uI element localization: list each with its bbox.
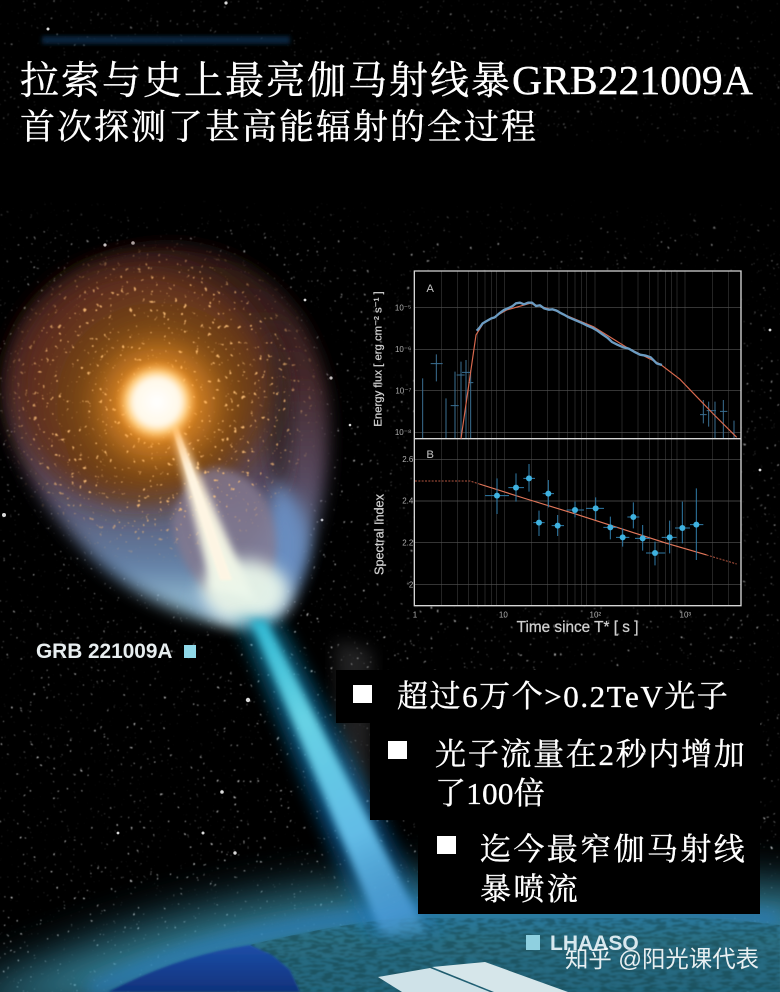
callout: narrowest jet: 暴喷流	[480, 872, 580, 907]
y ticks	[395, 303, 414, 589]
watermark: 知乎 @阳光课代表	[565, 946, 759, 972]
ground texture	[250, 918, 780, 992]
y ticks: 10⁻⁷	[395, 387, 411, 396]
earth and LHAASO ground	[0, 878, 780, 992]
title: 拉索与史上最亮伽马射线暴	[20, 60, 512, 103]
grey haze beside callouts	[336, 640, 372, 830]
white glow at jet base	[201, 560, 289, 624]
dim gap inside right rim	[265, 330, 292, 500]
chart: GRB light curve and spectral index: Spectral Index	[372, 493, 386, 575]
core glow	[102, 347, 214, 459]
chart: GRB light curve and spectral index: B	[426, 449, 434, 461]
x ticks: 10³	[680, 610, 691, 619]
spectral points	[494, 475, 699, 556]
orange inner cloud	[14, 265, 270, 505]
y ticks: 10⁻⁸	[395, 428, 411, 437]
flux error bars	[423, 354, 734, 438]
callout: over 60,000 photons: 超过6万个>0.2TeV光子	[397, 679, 729, 714]
y ticks: 2.6	[402, 455, 414, 464]
blue lower lobe	[190, 480, 308, 622]
x ticks: 10	[499, 610, 508, 619]
spectral fit	[479, 484, 707, 555]
atmosphere haze	[0, 878, 780, 992]
y ticks: 2.2	[402, 538, 414, 547]
outer shell	[6, 245, 329, 624]
observatory panels	[378, 968, 490, 992]
callout: photon flux growth: 了100倍	[435, 776, 545, 811]
frame	[414, 271, 741, 606]
ocean	[108, 945, 300, 992]
y ticks: 2	[409, 580, 414, 589]
white jet	[171, 425, 255, 600]
y ticks: 10⁻⁵	[395, 303, 411, 312]
x ticks	[413, 610, 691, 619]
chart: GRB light curve and spectral index: Time since T* [ s ]	[517, 619, 638, 636]
y ticks: 10⁻⁶	[395, 345, 411, 354]
label: GRB 221009A: GRB 221009A	[36, 640, 172, 663]
callout: over 60,000 photons	[336, 670, 760, 723]
y ticks: 2.4	[402, 497, 414, 506]
callout: photon flux growth: 光子流量在2秒内增加	[435, 737, 746, 772]
illustration: gamma-ray burst nebula	[0, 230, 360, 624]
atmosphere band	[90, 908, 780, 992]
cyan gamma-ray jet	[236, 618, 445, 945]
x ticks: 1	[413, 610, 418, 619]
land	[250, 912, 780, 992]
title	[20, 58, 753, 147]
purple bubble	[172, 468, 276, 610]
x ticks: 10²	[590, 610, 601, 619]
callout: narrowest jet	[418, 820, 760, 914]
callout: narrowest jet: 迄今最窄伽马射线	[480, 832, 747, 867]
chart: GRB light curve and spectral index	[372, 271, 741, 636]
title: GRB221009A	[512, 58, 753, 104]
star sparks	[1, 241, 318, 558]
title: 首次探测了甚高能辐射的全过程	[20, 108, 538, 147]
flux data	[477, 303, 662, 365]
callout: photon flux growth	[370, 723, 760, 820]
decorative top streak	[42, 36, 290, 44]
panel letters: A	[426, 283, 434, 295]
label: LHAASO: LHAASO	[550, 932, 639, 955]
flux fit	[461, 303, 737, 439]
axis titles: Energy flux [ erg cm⁻² s⁻¹ ]	[372, 291, 384, 427]
spectral error bars	[485, 464, 703, 565]
